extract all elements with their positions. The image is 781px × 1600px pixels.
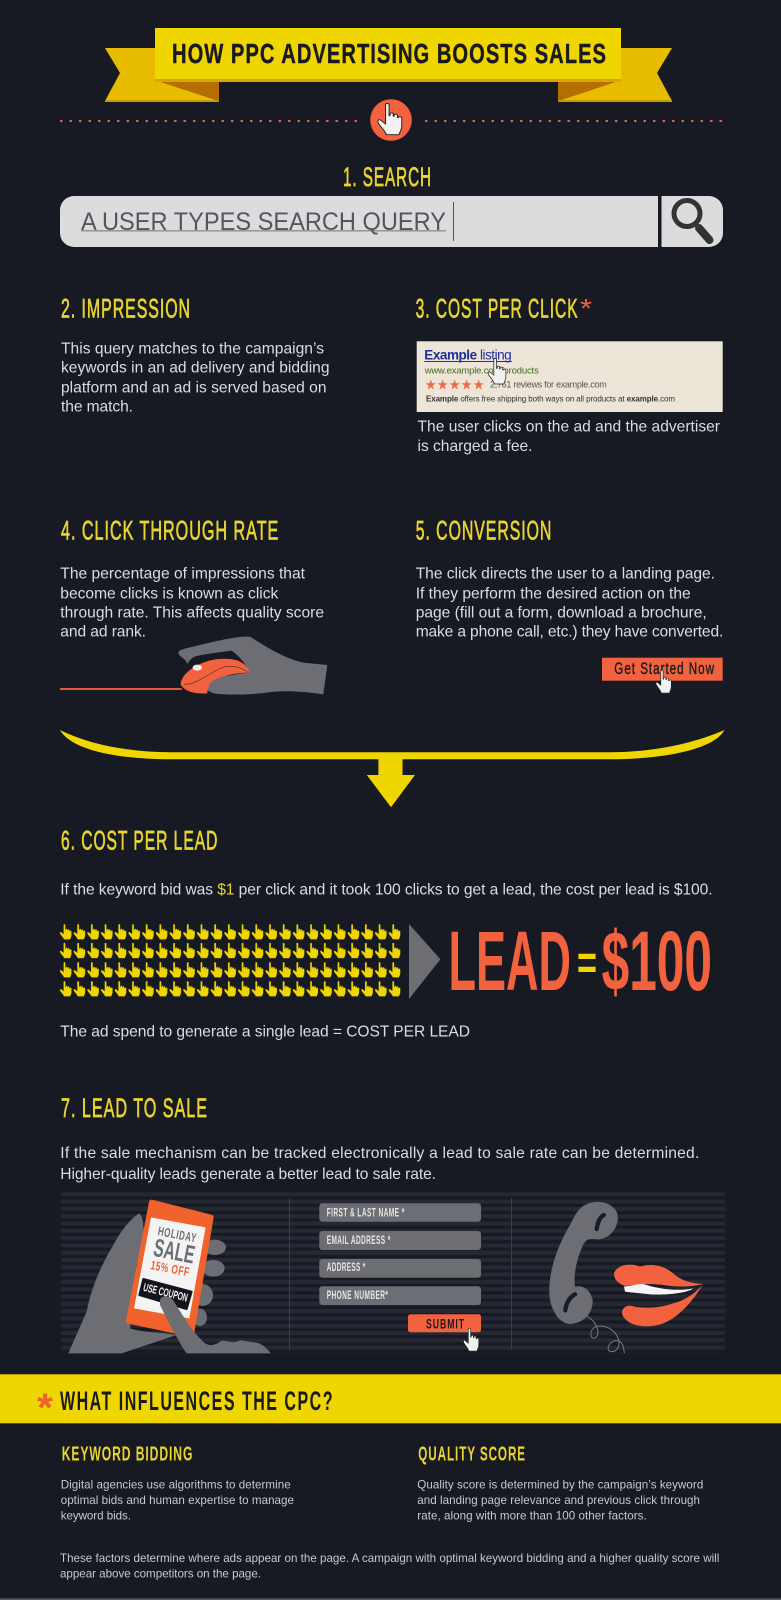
text: cost per click description: is charged a fee. [418, 438, 532, 455]
band: what influences the CPC [0, 1374, 781, 1430]
illustration: hand holding phone with coupon: HOLIDAY [157, 1224, 198, 1245]
column: keyword bidding: KEYWORD BIDDING [62, 1444, 193, 1466]
text: impression description: This query matches to the campaign’s [61, 340, 324, 357]
text: lead to sale description: Higher-quality leads generate a better lead to sale rate. [60, 1166, 436, 1183]
icon grid: 100 clicks [60, 924, 400, 996]
text: impression description: platform and an ad is served based on [61, 379, 326, 396]
text: click through rate description: through rate. This affects quality score [60, 605, 324, 622]
column: quality score [417, 1444, 703, 1523]
text: impression description: the match. [61, 399, 133, 416]
search bar: A USER TYPES SEARCH QUERY [81, 208, 446, 236]
text: cost per click description [418, 419, 720, 455]
banner: title ribbon: HOW PPC ADVERTISING BOOSTS SALES [172, 38, 607, 69]
ad listing example: Example offers free shipping both ways on all products at example.com [426, 394, 675, 403]
ad listing example: 2,761 reviews for example.com [490, 380, 607, 390]
column: keyword bidding: Digital agencies use algorithms to determine [61, 1478, 291, 1491]
text: closing note: appear above competitors on the page. [60, 1568, 261, 1581]
text: conversion description: make a phone call, etc.) they have converted. [416, 624, 723, 641]
lead form: FIRST & LAST NAME * [327, 1208, 405, 1220]
equation: lead = $100: = [577, 937, 597, 990]
column: quality score: rate, along with more than 100 other factors. [417, 1510, 647, 1523]
divider with pointer icon [60, 99, 722, 141]
text: click through rate description: become clicks is known as click [60, 585, 279, 602]
text: click through rate description [60, 565, 324, 641]
column: keyword bidding: optimal bids and human expertise to manage [61, 1494, 294, 1507]
heading: 1. search: 1. SEARCH [343, 162, 432, 192]
text: click through rate description: and ad rank. [60, 624, 146, 641]
text: click through rate description: The percentage of impressions that [60, 565, 306, 582]
heading: 3. cost per click [416, 294, 593, 324]
text: lead to sale description: If the sale mechanism can be tracked electronically a lead to sale rate can be determined. [60, 1145, 699, 1162]
illustration: hand on mouse [60, 637, 327, 694]
column: keyword bidding [61, 1444, 294, 1523]
text: conversion description: page (fill out a form, download a brochure, [416, 605, 707, 622]
button: get started now: Get Started Now [614, 660, 715, 678]
text: conversion description: If they perform the desired action on the [416, 585, 691, 602]
ad listing example: Example listing [424, 347, 512, 362]
illustration: hand holding phone with coupon: SALE [151, 1234, 197, 1269]
text: lead to sale description [60, 1145, 699, 1183]
illustration: telephone handset and lips [549, 1202, 703, 1353]
heading: 4. click through rate: 4. CLICK THROUGH RATE [61, 515, 279, 545]
bracket with down arrow [60, 730, 724, 807]
illustration: hand holding phone with coupon [68, 1202, 271, 1353]
lead form: EMAIL ADDRESS * [327, 1235, 391, 1247]
text: conversion description: The click directs the user to a landing page. [416, 565, 715, 582]
heading: 5. conversion: 5. CONVERSION [416, 515, 552, 545]
text: closing note [60, 1552, 719, 1581]
lead form [319, 1203, 481, 1351]
band: what influences the CPC: * [37, 1386, 53, 1430]
ad listing example: ★★★★★ [425, 378, 485, 394]
column: quality score: QUALITY SCORE [418, 1444, 526, 1466]
illustration: hand holding phone with coupon: 15% OFF [149, 1258, 191, 1279]
arrow: clicks to lead [409, 924, 440, 999]
ad listing example: www.example.com/products [424, 365, 539, 376]
text: bid example: If the keyword bid was $1 per click and it took 100 clicks to get a lead, the cost per lead is $100. [60, 881, 713, 898]
lead form: SUBMIT [426, 1315, 465, 1331]
column: quality score: and landing page relevance and previous click through [417, 1494, 700, 1507]
heading: 3. cost per click: * [580, 294, 593, 324]
search bar [60, 196, 723, 247]
heading: 7. lead to sale: 7. LEAD TO SALE [61, 1093, 208, 1123]
heading: 6. cost per lead: 6. COST PER LEAD [61, 825, 218, 855]
ad listing example [417, 341, 723, 412]
button: get started now [602, 658, 723, 693]
panel: lead to sale illustrations [61, 1192, 725, 1353]
equation: lead = $100: LEAD [448, 914, 571, 1008]
band: what influences the CPC: WHAT INFLUENCES THE CPC? [60, 1386, 334, 1416]
text: impression description: keywords in an ad delivery and bidding [61, 360, 330, 377]
column: keyword bidding: keyword bids. [61, 1510, 131, 1523]
lead form: ADDRESS * [327, 1262, 366, 1274]
text: cost per click description: The user clicks on the ad and the advertiser [418, 419, 720, 436]
lead form: PHONE NUMBER* [327, 1290, 388, 1302]
text: conversion description [416, 565, 723, 641]
column: quality score: Quality score is determined by the campaign’s keyword [417, 1478, 703, 1491]
illustration: hand holding phone with coupon: USE COUPON [142, 1282, 189, 1305]
text: impression description [61, 340, 330, 416]
text: cost per lead definition: The ad spend to generate a single lead = COST PER LEAD [60, 1024, 470, 1040]
text: closing note: These factors determine where ads appear on the page. A campaign with optimal keyword bidding and a higher quality score will [60, 1552, 719, 1565]
heading: 2. impression: 2. IMPRESSION [61, 294, 191, 324]
banner: title ribbon [105, 28, 672, 102]
heading: 3. cost per click: 3. COST PER CLICK [416, 294, 579, 324]
